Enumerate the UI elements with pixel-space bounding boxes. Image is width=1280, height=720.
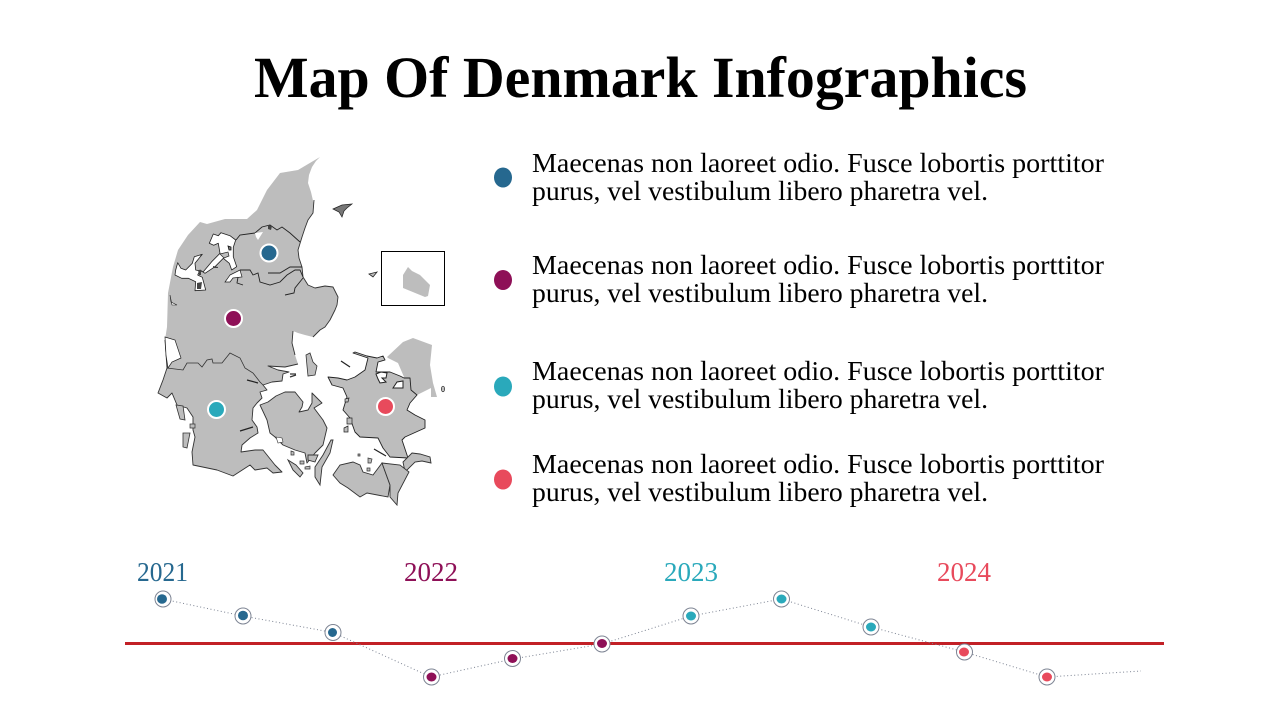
legend item 2 xyxy=(494,250,1104,308)
legend item 4 xyxy=(494,449,1104,507)
legend item 3 xyxy=(494,356,1104,414)
year labels xyxy=(137,557,992,587)
Limfjord islands xyxy=(220,252,229,258)
region: Zealand xyxy=(328,338,445,505)
year labels: 2021 xyxy=(137,557,188,587)
region: Jutland xyxy=(158,157,338,476)
map of Denmark xyxy=(158,157,445,505)
legend item 2: Maecenas non laoreet odio. Fusce lobortis porttitor xyxy=(532,250,1104,280)
pin: north xyxy=(260,244,278,262)
title: Map Of Denmark Infographics xyxy=(254,45,1027,110)
Mariager and Randers fjords xyxy=(225,270,242,282)
legend item 4: purus, vel vestibulum libero pharetra vel. xyxy=(532,477,988,507)
legend item 2: purus, vel vestibulum libero pharetra vel. xyxy=(532,278,988,308)
pin: south xyxy=(208,401,225,418)
legend item 4: Maecenas non laoreet odio. Fusce lobortis porttitor xyxy=(532,449,1104,479)
dotted trend line xyxy=(162,599,1141,677)
island: Anholt xyxy=(369,272,377,277)
region: Funen xyxy=(260,353,333,485)
inland coastlines xyxy=(167,353,263,385)
pin: zealand xyxy=(377,398,394,415)
Møn xyxy=(403,453,431,472)
legend item 1 xyxy=(494,148,1104,206)
legend item 3: purus, vel vestibulum libero pharetra vel. xyxy=(532,384,988,414)
year labels: 2023 xyxy=(664,557,718,587)
north inlet lines xyxy=(236,225,300,242)
timeline xyxy=(125,557,1164,685)
legend item 1: Maecenas non laoreet odio. Fusce lobortis porttitor xyxy=(532,148,1104,178)
island: Læsø xyxy=(333,204,352,217)
Falster xyxy=(382,463,409,505)
year labels: 2024 xyxy=(937,557,992,587)
red axis line xyxy=(125,642,1164,645)
inset: Bornholm xyxy=(382,252,444,306)
timeline nodes xyxy=(155,591,1055,685)
Ringkøbing and Nissum fjords xyxy=(165,337,181,368)
year labels: 2022 xyxy=(404,557,458,587)
Lolland xyxy=(333,462,390,497)
Wadden Sea islands xyxy=(176,405,185,420)
coast outline xyxy=(158,200,338,476)
legend item 1: purus, vel vestibulum libero pharetra vel. xyxy=(532,176,988,206)
pin: central xyxy=(225,310,242,327)
Limfjord xyxy=(175,233,237,291)
legend item 3: Maecenas non laoreet odio. Fusce lobortis porttitor xyxy=(532,356,1104,386)
